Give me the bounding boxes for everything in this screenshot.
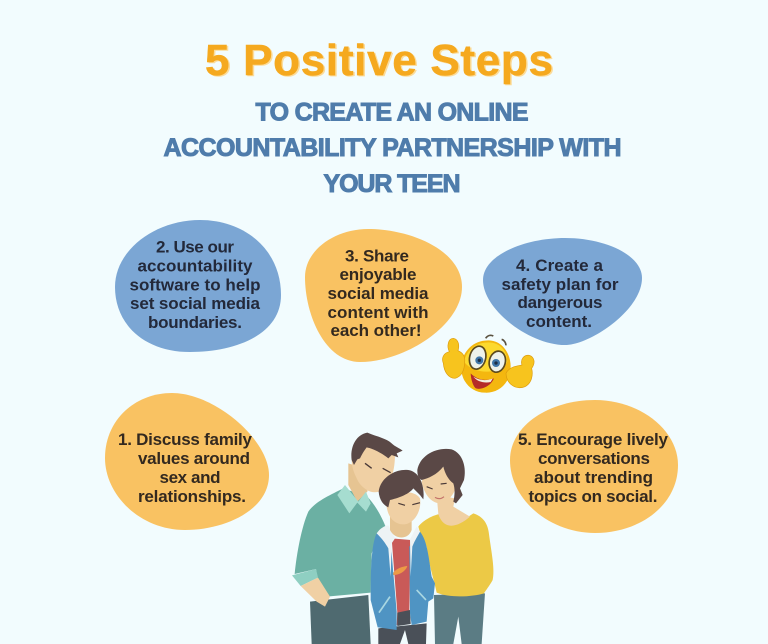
title: 5 Positive Steps	[205, 36, 553, 85]
panel: step 1: relationships.	[138, 487, 246, 506]
illustration: family	[292, 433, 493, 644]
panel: step 5: topics on social.	[528, 487, 658, 506]
panel: step 1	[105, 393, 269, 530]
panel: step 2: software to help	[130, 276, 260, 294]
panel: step 4: content.	[526, 312, 592, 331]
father	[292, 433, 403, 644]
panel: step 3: 3. Share	[345, 246, 409, 266]
title: 5 Positive Steps	[206, 37, 554, 86]
panel: step 2: set social media	[130, 294, 261, 313]
panel: step 1: 1. Discuss family	[118, 430, 253, 449]
panel: step 3: content with	[328, 303, 428, 322]
panel: step 2: 2. Use our	[156, 238, 234, 256]
panel: step 3	[305, 229, 462, 362]
panel: step 3: enjoyable	[340, 265, 416, 284]
panel: step 2	[115, 220, 281, 352]
panel: step 5: 5. Encourage lively	[518, 430, 669, 449]
subtitle	[164, 98, 622, 198]
panel: step 4: 4. Create a	[516, 256, 604, 275]
panel: step 5	[510, 400, 678, 533]
subtitle: ACCOUNTABILITY PARTNERSHIP WITH	[164, 134, 622, 162]
panel: step 5: conversations	[538, 449, 650, 468]
panel: step 1: values around	[138, 449, 250, 468]
icon: thumbs-up emoji	[443, 335, 534, 393]
panel: step 3: social media	[328, 284, 429, 303]
panel: step 1: sex and	[160, 468, 220, 487]
teen	[371, 470, 435, 644]
panel: step 4: safety plan for	[502, 275, 619, 294]
panel: step 2: boundaries.	[148, 313, 242, 332]
subtitle: TO CREATE AN ONLINE	[256, 98, 528, 126]
panel: step 2: accountability	[138, 256, 253, 276]
panel: step 4: dangerous	[518, 293, 602, 312]
panel: step 3: each other!	[330, 321, 422, 340]
subtitle: YOUR TEEN	[324, 170, 460, 198]
panel: step 5: about trending	[534, 468, 653, 487]
panel: step 4	[483, 238, 642, 345]
mother	[417, 449, 493, 644]
